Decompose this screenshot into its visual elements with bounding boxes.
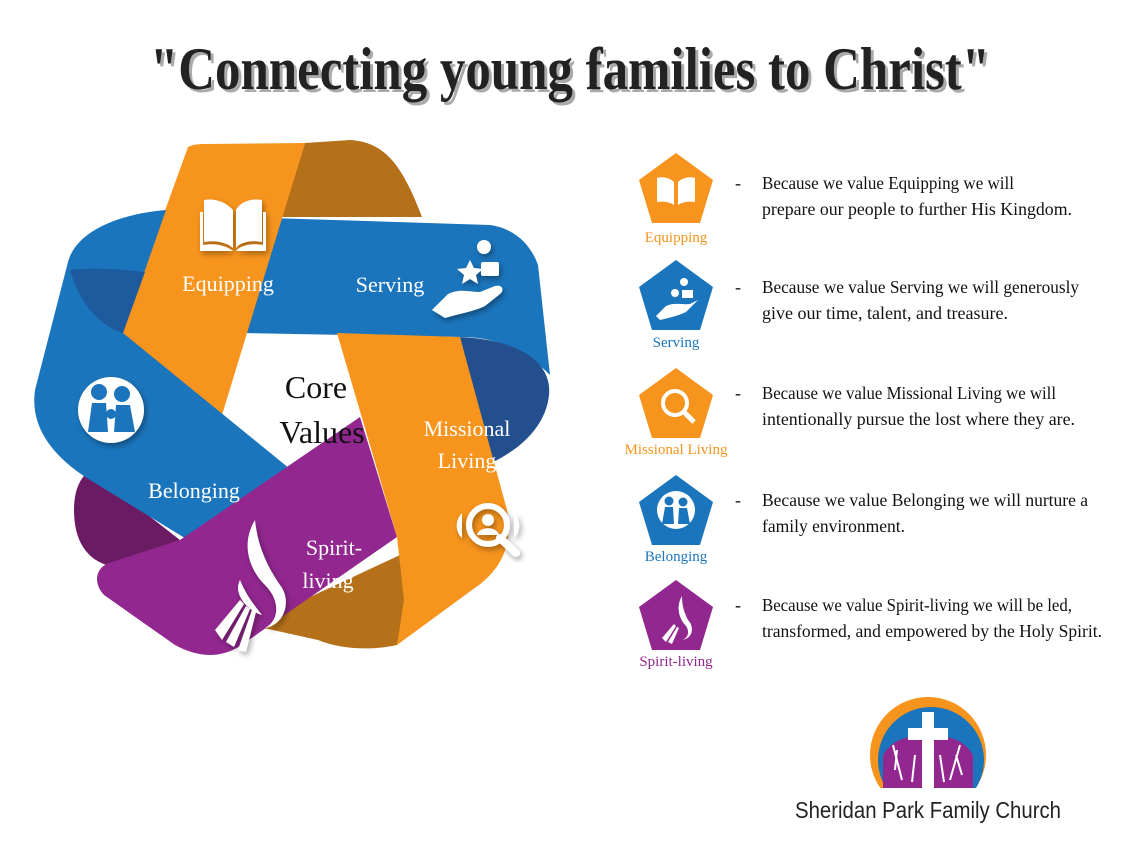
icon: hand with gifts <box>432 240 502 318</box>
item: Equipping: Equipping <box>645 230 708 246</box>
icon: book <box>200 199 266 251</box>
label: Spirit-living: Spirit- <box>306 535 362 560</box>
fold: dark blue right <box>460 337 549 462</box>
item: Spirit-living: Spirit-living <box>639 654 713 670</box>
band: Missional Living <box>337 333 509 645</box>
item: Belonging: family environment. <box>762 516 905 536</box>
item: Missional Living: - <box>735 383 741 403</box>
item: Serving: give our time, talent, and treasure. <box>762 303 1008 323</box>
item: Spirit-living: transformed, and empowered by the Holy Spirit. <box>762 621 1102 641</box>
item: Serving: Serving <box>653 335 700 351</box>
item: Missional Living: intentionally pursue the lost where they are. <box>762 409 1075 429</box>
label: Missional Living: Living <box>438 448 496 473</box>
core values knot diagram <box>34 140 550 655</box>
icon: family circle <box>78 377 144 443</box>
item: Equipping: Because we value Equipping we will <box>762 173 1014 193</box>
label: Core Values: Core <box>285 369 347 405</box>
title: "Connecting young families to Christ" <box>150 36 990 102</box>
title: "Connecting young families to Christ" <box>153 39 993 105</box>
label: Serving: Serving <box>356 272 424 297</box>
label: Belonging: Belonging <box>148 478 240 503</box>
item: Equipping <box>639 153 1072 246</box>
fold: dark purple left <box>74 470 180 566</box>
item: Spirit-living: Because we value Spirit-living we will be led, <box>762 595 1072 615</box>
item: Missional Living: Because we value Missional Living we will <box>762 383 1056 403</box>
label: Missional Living: Missional <box>424 416 510 441</box>
item: Belonging: Because we value Belonging we will nurture a <box>762 490 1088 510</box>
item: Serving: - <box>735 277 741 297</box>
label: Equipping: Equipping <box>182 271 274 296</box>
band: Equipping <box>120 143 305 415</box>
logo: Sheridan Park Family Church <box>795 697 1061 823</box>
label: Missional Living <box>424 416 510 473</box>
list: core value descriptions <box>625 153 1102 670</box>
fold: dark orange bottom <box>250 555 409 648</box>
item: Spirit-living <box>639 580 1102 670</box>
band: Belonging <box>34 210 290 540</box>
band: Spirit-living <box>97 417 397 655</box>
item: Belonging: Belonging <box>645 549 708 565</box>
label: Spirit-living: living <box>302 568 354 593</box>
label: Spirit-living <box>302 535 362 593</box>
label: Core Values <box>279 369 365 450</box>
item: Missional Living <box>625 368 1075 458</box>
item: Belonging <box>639 475 1088 565</box>
fold: dark orange top <box>282 140 422 217</box>
icon: magnifier <box>457 506 519 553</box>
item: Serving <box>639 260 1079 351</box>
label: Core Values: Values <box>279 414 365 450</box>
icon: dove <box>215 520 286 652</box>
item: Belonging: - <box>735 490 741 510</box>
item: Equipping: prepare our people to further His Kingdom. <box>762 199 1072 219</box>
logo: Sheridan Park Family Church: Sheridan Park Family Church <box>795 797 1061 823</box>
item: Serving: Because we value Serving we will generously <box>762 277 1079 297</box>
item: Spirit-living: - <box>735 595 741 615</box>
item: Missional Living: Missional Living <box>625 442 728 458</box>
band: Serving <box>240 217 550 375</box>
item: Equipping: - <box>735 173 741 193</box>
